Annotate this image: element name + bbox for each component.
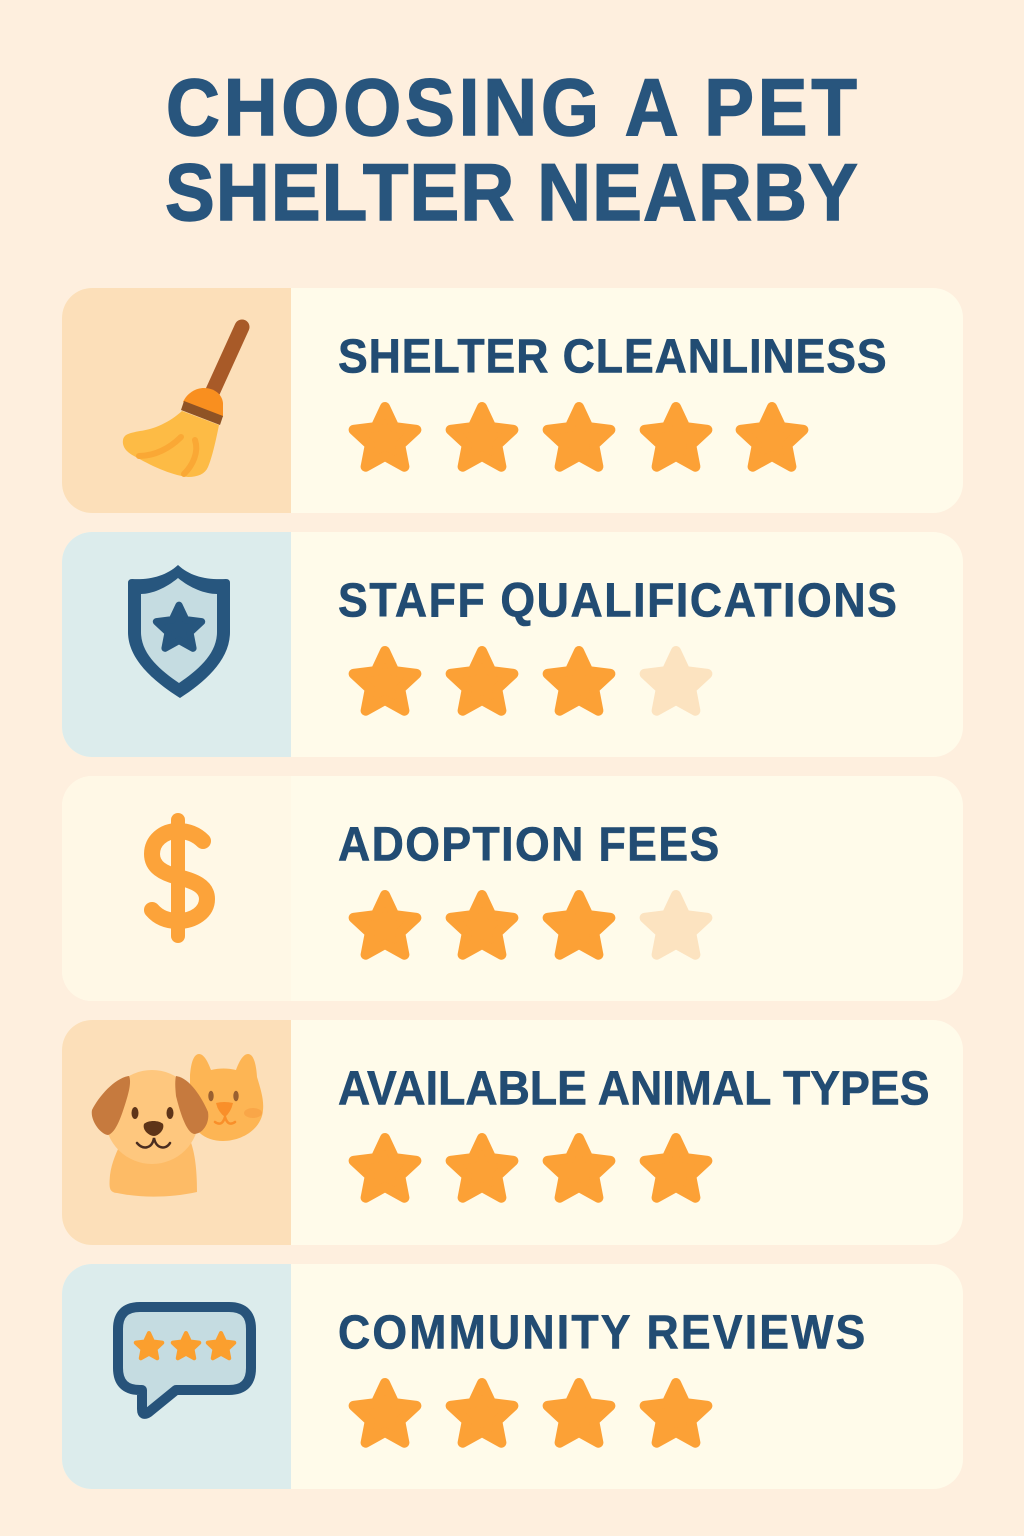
rating: four stars xyxy=(354,1138,707,1198)
label: adoption fees: ADOPTION FEES xyxy=(338,817,719,871)
panel: available animal types xyxy=(62,1020,963,1245)
icon: broom xyxy=(123,327,242,477)
panel: community reviews xyxy=(62,1264,963,1489)
rating: four stars xyxy=(354,1383,707,1443)
panel: shelter cleanliness xyxy=(62,288,963,513)
title: CHOOSING A PET xyxy=(166,63,857,153)
icon: dollar sign xyxy=(152,820,207,936)
panel: adoption fees xyxy=(62,776,963,1001)
label: community reviews: COMMUNITY REVIEWS xyxy=(338,1305,865,1359)
icon: speech bubble with stars xyxy=(118,1307,251,1414)
label: shelter cleanliness: SHELTER CLEANLINESS xyxy=(338,329,887,383)
panel: staff qualifications xyxy=(62,532,963,757)
icon: shield with star xyxy=(128,565,230,698)
icon: cat behind dog xyxy=(92,1054,263,1197)
rating: three of four stars xyxy=(354,895,707,955)
label: available animal types: AVAILABLE ANIMAL TYPES xyxy=(338,1061,929,1115)
rating: three of four stars xyxy=(354,651,707,711)
title xyxy=(165,63,858,238)
rating: five stars xyxy=(354,407,803,467)
title: SHELTER NEARBY xyxy=(165,148,858,238)
label: staff qualifications: STAFF QUALIFICATIONS xyxy=(338,573,897,627)
